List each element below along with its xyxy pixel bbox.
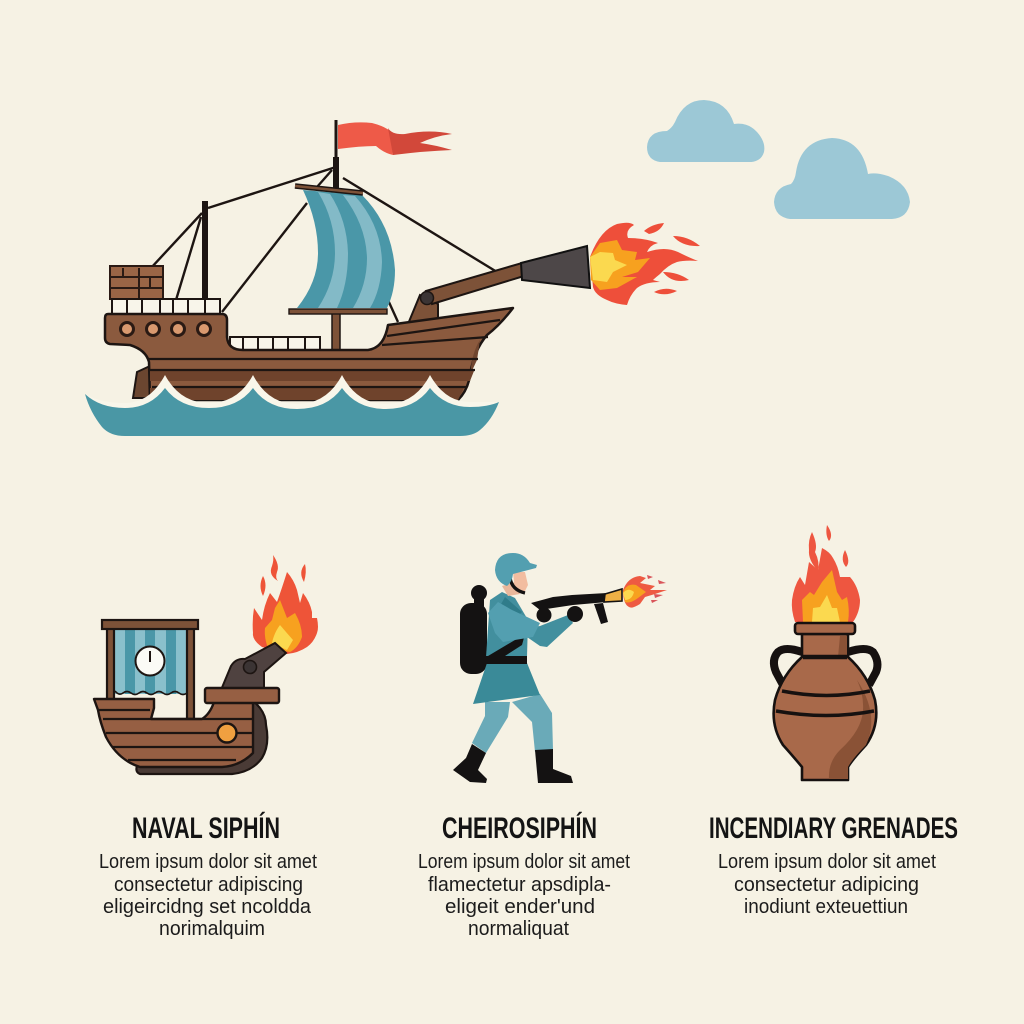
flame [792,525,860,622]
clock [136,646,164,676]
illustration: naval siphon ship [94,555,318,774]
description: consectetur adipicing [734,874,919,896]
stern railing [112,299,220,314]
hull [105,308,513,400]
flame from cannon [590,223,700,305]
tunic [473,592,540,704]
cannon barrel [426,263,524,304]
column: naval siphon text [99,811,317,940]
rigging lines [112,167,497,322]
description: norimalquim [159,918,265,940]
keel [136,700,267,774]
main mast top [334,120,338,160]
deck railing [230,337,320,351]
description: Lorem ipsum dolor sit amet [718,851,936,873]
flame gun [531,589,622,624]
boots [453,744,573,783]
cannon nozzle [521,246,590,288]
hull [94,699,253,767]
portholes [120,322,210,336]
icon: cloud left [647,100,764,162]
platform [205,688,279,703]
description: consectetur adipiscing [114,874,303,896]
heading: CHEIROSIPHÍN [442,811,597,845]
description [718,851,936,918]
cannon carriage [408,295,438,324]
illustration: fire ship [85,120,700,436]
heading: NAVAL SIPHÍN [132,811,280,845]
illustration: fire vase [774,525,877,780]
rudder [133,366,152,398]
crate on stern [110,266,163,299]
curtain [115,630,187,694]
head [495,553,537,596]
description: inodiunt exteuettiun [744,896,908,918]
description: eligeit ender'und [445,896,595,918]
description: eligeircidng set ncoldda [103,896,312,918]
yards [295,186,363,193]
sail [297,190,395,308]
legs [472,694,553,753]
flame [253,555,318,654]
fuel tank [460,585,490,674]
description: flamectetur apsdipla- [428,874,611,896]
description [418,851,630,940]
column: incendiary grenades text [709,812,958,918]
illustration: soldier with cheirosiphon [453,553,667,783]
description [99,851,317,940]
description: Lorem ipsum dolor sit amet [99,851,317,873]
description: normaliquat [468,918,569,940]
aft mast [202,201,208,314]
frame [102,620,198,719]
vase body [774,623,876,780]
lower mast [332,312,340,350]
sea [85,375,499,436]
flag [338,122,452,155]
description: Lorem ipsum dolor sit amet [418,851,630,873]
column: cheirosiphon text [418,811,630,940]
flame [623,575,667,608]
arms [488,602,573,647]
handles [774,649,877,685]
cannon [221,643,286,690]
strap and belt [486,634,527,664]
icon: cloud right [774,138,910,219]
